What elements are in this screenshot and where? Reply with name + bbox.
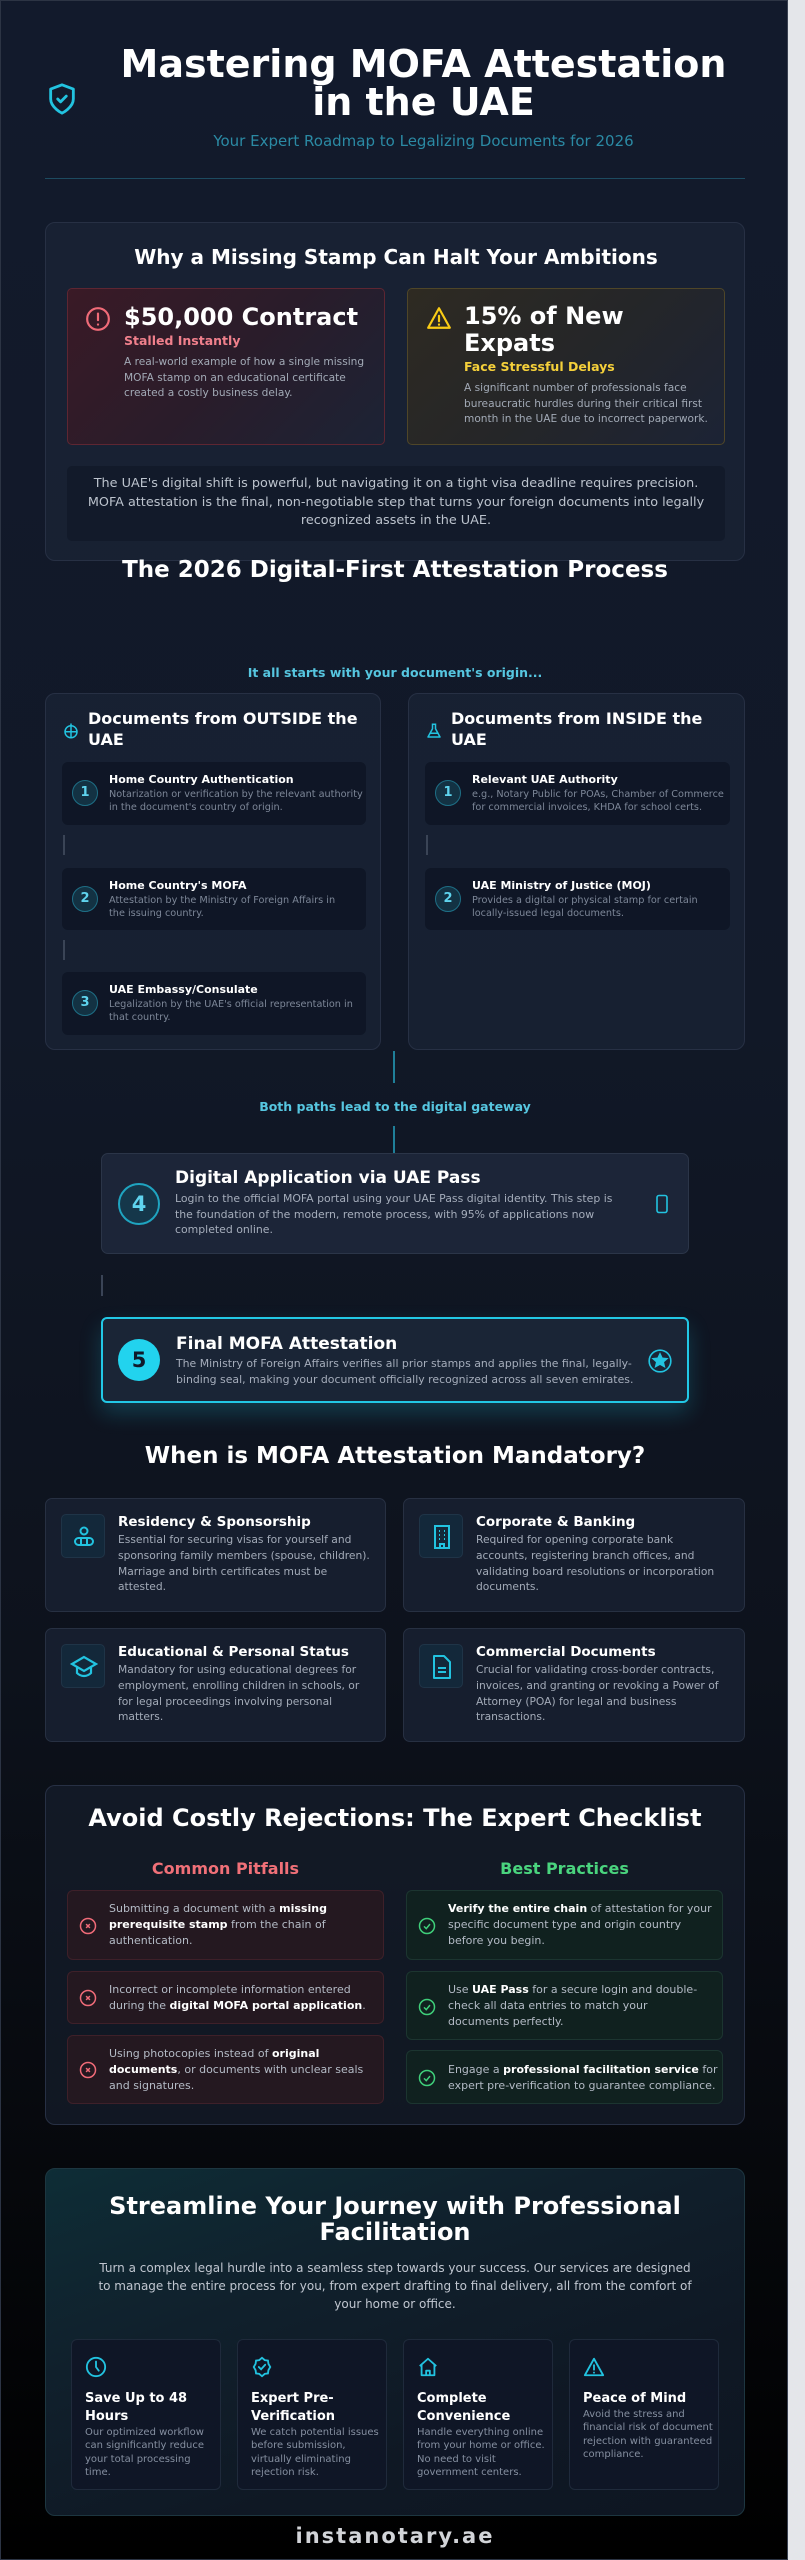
step 1 outside: Notarization or verification by the relevant authority in the document's country of origin. [109,789,363,813]
card: commercial: Commercial Documents [476,1644,656,1660]
title: Mastering MOFA Attestation [121,42,726,86]
card: commercial: Crucial for validating cross-border contracts, invoices, and granting or revoking a Power of Attorney (POA) for legal and business transactions. [476,1663,719,1723]
heading: outside [88,709,358,749]
card: save 48 hours: Our optimized workflow can significantly reduce your total processing time. [85,2427,204,2478]
heading: why missing stamp: Why a Missing Stamp Can Halt Your Ambitions [134,245,658,269]
step 1 outside: 1 [80,785,90,800]
icon: phone [656,1194,668,1214]
panel: checklist [45,1785,745,2125]
step 3 outside [62,972,366,1035]
step 4: digital application: Digital Application via UAE Pass [175,1168,481,1188]
heading: best practices: Best Practices [500,1859,629,1878]
step 3 outside: 3 [80,995,90,1010]
icon: graduation cap [61,1644,105,1688]
stat card: 15% of new expats: 15% of New [464,302,624,330]
step 2 inside: UAE Ministry of Justice (MOJ) [472,879,651,892]
card: corporate: Corporate & Banking [476,1514,635,1530]
subtitle: Your Expert Roadmap to Legalizing Documents for 2026 [213,132,634,150]
card: expert pre-verification: We catch potential issues before submission, virtually eliminating rejection risk. [251,2427,379,2478]
step 5: final MOFA attestation [101,1317,689,1403]
best 1 [406,1890,723,1960]
heading: checklist: Avoid Costly Rejections: The Expert Checklist [88,1804,702,1832]
step 3 outside: UAE Embassy/Consulate [109,983,258,996]
step 2 inside: Provides a digital or physical stamp for certain locally-issued legal documents. [472,895,698,919]
heading: common pitfalls: Common Pitfalls [152,1859,299,1878]
step 1 inside [425,762,730,825]
step 2 outside: 2 [80,891,90,906]
card: complete convenience: Handle everything online from your home or office. No need to visit government centers. [417,2427,545,2478]
card: save 48 hours: Save Up to 48 Hours [85,2391,187,2424]
card: corporate [403,1498,745,1612]
step 1 inside: 1 [443,785,453,800]
stat card: $50,000 contract: Stalled Instantly [124,333,240,348]
step 2 outside: Attestation by the Ministry of Foreign Affairs in the issuing country. [109,895,335,919]
best 2 [406,1971,723,2040]
step 2 inside: 2 [443,891,453,906]
step 1 inside: Relevant UAE Authority [472,773,618,786]
card: save 48 hours [71,2339,221,2490]
pitfall 1: Submitting a document with a missing prerequisite stamp from the chain of authentication. [109,1902,327,1947]
step 4: digital application: Login to the official MOFA portal using your UAE Pass digital identity. This step is the foundation of the modern, remote process, with 95% of applications now completed online. [175,1192,612,1236]
best 1: Verify the entire chain of attestation for your specific document type and origin country before you begin. [448,1902,712,1947]
footer: brand: instanotary.ae [296,2524,494,2548]
step 4: digital application: 4 [132,1192,146,1216]
stat card: $50,000 contract: A real-world example of how a single missing MOFA stamp on an educational certificate created a costly business delay. [124,356,364,399]
stat card: 15% of new expats: A significant number of professionals face bureaucratic hurdles during their critical first month in the UAE due to incorrect paperwork. [464,382,708,425]
text block: digital shift note: The UAE's digital shift is powerful, but navigating it on a tight visa deadline requires precision. MOFA attestation is the final, non-negotiable step that turns your foreign documents into legally recognized assets in the UAE. [88,476,704,528]
card: residency: Essential for securing visas for yourself and sponsoring family members (spouse, children). Marriage and birth certificates must be attested. [118,1533,370,1593]
best 3 [406,2050,723,2104]
stat card: 15% of new expats [407,288,725,445]
icon: star seal [648,1349,672,1373]
card: peace of mind: Peace of Mind [583,2391,686,2406]
panel: streamline [45,2168,745,2516]
card: educational [45,1628,386,1742]
step 5: final MOFA attestation: 5 [132,1348,146,1372]
heading: streamline: Facilitation [319,2218,471,2246]
card: peace of mind: Avoid the stress and financial risk of document rejection with guaranteed compliance. [583,2409,713,2460]
step 2 outside: Home Country's MOFA [109,879,246,892]
icon: building [419,1514,463,1558]
step 1 outside: Home Country Authentication [109,773,294,786]
icon: shield check [49,83,75,115]
step 2 outside [62,868,366,930]
pitfall 3: Using photocopies instead of original documents, or documents with unclear seals and signatures. [109,2047,363,2092]
card: expert pre-verification: Expert Pre-Verification [251,2391,335,2424]
text block: digital shift note [67,466,725,541]
card: residency [45,1498,386,1612]
heading: inside: UAE [451,730,487,749]
heading: inside: Documents from INSIDE the [451,709,702,728]
stat card: 15% of new expats: Face Stressful Delays [464,359,615,374]
pitfall 1 [67,1890,384,1960]
icon: warning triangle [427,307,451,329]
card: expert pre-verification [237,2339,387,2490]
step 5: final MOFA attestation: The Ministry of Foreign Affairs verifies all prior stamps and applies the final, legally-binding seal, making your document officially recognized across all seven emirates. [176,1357,633,1386]
heading: outside: Documents from OUTSIDE the [88,709,358,728]
title: in the UAE [312,80,535,124]
card: complete convenience: Complete Convenience [417,2391,510,2424]
panel: outside UAE [45,693,381,1050]
text: both paths: Both paths lead to the digital gateway [259,1099,531,1114]
heading: 2026 process: The 2026 Digital-First Attestation Process [122,557,668,583]
heading: outside: UAE [88,730,124,749]
card: complete convenience [403,2339,553,2490]
panel: inside UAE [408,693,745,1050]
step 1 inside: e.g., Notary Public for POAs, Chamber of Commerce for commercial invoices, KHDA for school certs. [472,789,724,813]
card: commercial [403,1628,745,1742]
icon: person [61,1514,105,1558]
icon: alert circle [86,307,110,331]
step 5: final MOFA attestation: Final MOFA Attestation [176,1334,397,1354]
best 2: Use UAE Pass for a secure login and double-check all data entries to match your documents perfectly. [448,1983,697,2028]
icon: document [419,1644,463,1688]
title [121,42,726,124]
text: streamline intro: Turn a complex legal hurdle into a seamless step towards your success. Our services are designed to manage the entire process for you, from expert drafting to final delivery, all from the comfort of your home or office. [98,2261,692,2311]
card: corporate: Required for opening corporate bank accounts, registering branch offices, and validating board resolutions or incorporation documents. [476,1533,714,1593]
pitfall 2 [67,1971,384,2024]
best 3: Engage a professional facilitation service for expert pre-verification to guarantee compliance. [448,2063,717,2092]
card: residency: Residency & Sponsorship [118,1514,311,1530]
heading: streamline [109,2192,681,2246]
step 1 outside [62,762,366,825]
step 3 outside: Legalization by the UAE's official representation in that country. [109,999,353,1023]
icon: flask [427,724,441,738]
panel: why a missing stamp [45,222,745,561]
heading: inside [451,709,702,749]
card: peace of mind [569,2339,719,2490]
heading: streamline: Streamline Your Journey with Professional [109,2192,681,2220]
card: educational: Educational & Personal Status [118,1644,349,1660]
step 2 inside [425,868,730,930]
stat card: 15% of new expats: Expats [464,329,555,357]
text: starts with origin: It all starts with your document's origin... [248,665,542,680]
pitfall 3 [67,2035,384,2104]
pitfall 2: Incorrect or incomplete information entered during the digital MOFA portal application. [109,1983,366,2012]
stat card: $50,000 contract: $50,000 Contract [124,303,358,331]
stat card: $50,000 contract [67,288,385,445]
card: educational: Mandatory for using educational degrees for employment, enrolling children in schools, or for legal proceedings involving personal matters. [118,1663,359,1723]
heading: when mandatory: When is MOFA Attestation Mandatory? [145,1443,645,1469]
step 4: digital application [101,1153,689,1254]
icon: globe [64,724,78,738]
